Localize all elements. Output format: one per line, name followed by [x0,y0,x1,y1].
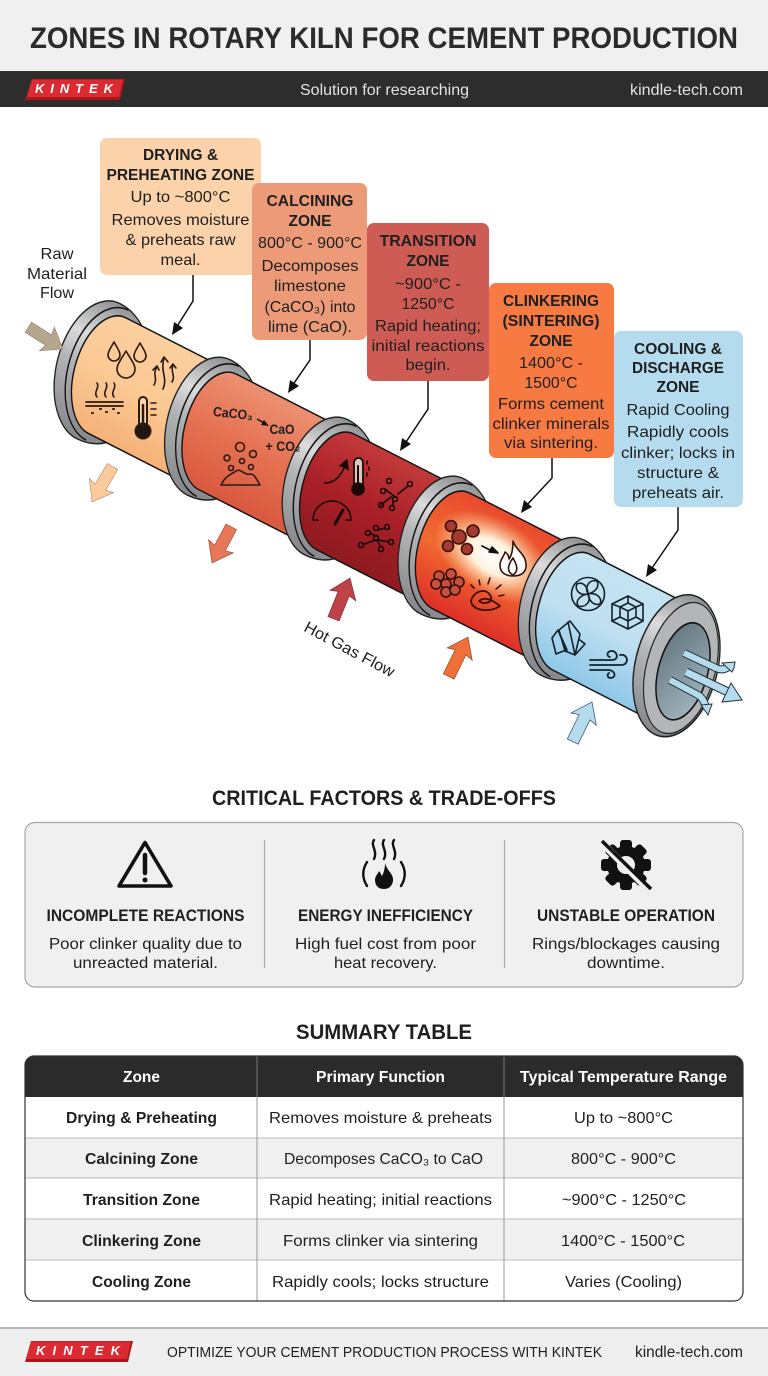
row: drying: Removes moisture & preheats [269,1110,492,1127]
table header: Primary Function [316,1069,445,1086]
segment: calcining [169,359,359,552]
formula: calcining reaction: + CO₂ [266,439,300,454]
row: drying: Drying & Preheating [66,1110,217,1127]
callout: calcining: limestone [274,278,346,295]
icons: drying zone [86,342,176,438]
label: hot gas flow: Hot Gas Flow [301,619,398,681]
callout: transition [367,223,489,381]
glow [424,491,562,622]
callout: cooling and discharge: clinker; locks in [621,445,735,462]
row: cooling [92,1274,682,1291]
leader arrow: cooling [646,507,678,577]
row: transition: Transition Zone [83,1192,200,1209]
row: transition: Rapid heating; initial reactions [269,1192,492,1209]
callout: calcining: CALCINING [266,193,354,210]
row: drying [66,1110,673,1127]
icons: transition zone [313,458,412,552]
factor: unstable operation [532,840,720,972]
arrow: hot gas orange [436,631,481,683]
callout: calcining: Decomposes [262,258,358,275]
table header [123,1069,727,1086]
callout: calcining: lime (CaO). [268,319,352,336]
segment: drying [58,302,242,492]
arrow: calcining outflow [200,520,244,570]
callout: transition: begin. [406,357,450,374]
callout: cooling and discharge: preheats air. [632,485,724,502]
callout: clinkering: ZONE [530,333,573,350]
footer [0,1328,768,1376]
kiln body [38,283,736,753]
label: raw material flow: Raw [40,246,74,263]
icons: clinkering zone [431,520,526,610]
row: transition [83,1192,686,1209]
callout: clinkering [489,283,614,458]
panel: critical factors [25,822,743,987]
callout: cooling and discharge: structure & [637,465,719,482]
callout: drying and preheating: Up to ~800°C [130,189,230,206]
footer tagline: OPTIMIZE YOUR CEMENT PRODUCTION PROCESS WITH KINTEK [167,1344,602,1361]
callout: transition: 1250°C [402,296,454,313]
callout: transition: ZONE [406,253,450,270]
callout: calcining [252,183,367,340]
heading: summary table: SUMMARY TABLE [296,1021,472,1044]
table header: Typical Temperature Range [520,1069,727,1086]
flange 5 [502,521,611,689]
factor: energy inefficiency [295,840,477,972]
factor: unstable operation: downtime. [587,955,665,972]
leader arrow: clinkering [521,458,552,513]
callout: clinkering: via sintering. [504,435,598,452]
row: transition: ~900°C - 1250°C [562,1192,686,1209]
row: cooling: Varies (Cooling) [565,1274,682,1291]
tagline: Solution for researching [300,82,469,99]
row: calcining: Decomposes CaCO₃ to CaO [284,1151,483,1168]
summary table [25,1056,743,1301]
factor: unstable operation: Rings/blockages causing [532,936,720,953]
callout: transition: TRANSITION [380,233,476,250]
row: cooling: Cooling Zone [92,1274,191,1291]
callout: drying and preheating: meal. [160,252,200,269]
callout: drying and preheating: PREHEATING ZONE [106,167,255,184]
callout: cooling and discharge: ZONE [656,379,700,396]
factor: incomplete reactions: INCOMPLETE REACTIONS [46,906,244,925]
segment: cooling [522,539,698,725]
logo: KINTEK [25,79,125,100]
logo: KINTEK: KINTEK [35,81,115,96]
formula: calcining reaction: CaO [270,422,294,437]
footer logo: KINTEK [36,1343,122,1358]
callout: clinkering: 1400°C - [519,355,583,372]
callout: drying and preheating: Removes moisture [112,212,250,229]
factor: incomplete reactions: unreacted material. [73,955,218,972]
label: raw material flow [27,246,87,302]
table header: Zone [123,1069,160,1086]
row: cooling: Rapidly cools; locks structure [272,1274,489,1291]
formula: calcining reaction: CaCO₃ [212,404,254,423]
flange 3 [266,400,375,568]
callout: clinkering: Forms cement [498,396,605,413]
callout: transition: Rapid heating; [375,318,481,335]
callout: drying and preheating [100,138,261,275]
icon: crossed gear [601,840,651,890]
callout: cooling and discharge: COOLING & [634,341,722,358]
factor: energy inefficiency: High fuel cost from poor [295,936,477,953]
footer logo [25,1341,133,1362]
callout: clinkering: 1500°C [524,375,578,392]
website: kindle-tech.com [630,82,743,99]
label: raw material flow: Material [27,266,87,283]
factor: incomplete reactions [46,842,244,972]
segment: transition [286,419,475,611]
heading: critical factors: CRITICAL FACTORS & TRADE-OFFS [212,787,556,810]
row: calcining: 800°C - 900°C [571,1151,676,1168]
callout: cooling and discharge [614,331,743,507]
callout: drying and preheating: DRYING & [143,147,218,164]
leader arrow: transition [400,381,428,451]
leader arrow: drying [172,275,193,335]
row: calcining: Calcining Zone [85,1151,198,1168]
arrow: hot gas blue [560,696,605,748]
callout: cooling and discharge: DISCHARGE [632,360,724,377]
factor: energy inefficiency: heat recovery. [334,955,437,972]
flange 4 [382,459,491,627]
row: clinkering [82,1233,685,1250]
row: drying: Up to ~800°C [574,1110,673,1127]
row: calcining [85,1151,676,1168]
footer website: kindle-tech.com [635,1344,743,1361]
callout: calcining: 800°C - 900°C [258,235,362,252]
callout: transition: ~900°C - [395,276,461,293]
factor: energy inefficiency: ENERGY INEFFICIENCY [298,906,474,925]
exit arrows [670,653,742,715]
callout: calcining: (CaCO₃) into [264,299,356,316]
icon: heat and flame [363,840,405,889]
flange 2 [148,340,257,508]
arrow: raw material in [21,315,70,361]
callout: clinkering: (SINTERING) [502,313,600,330]
end flange [617,578,736,753]
row: clinkering: Clinkering Zone [82,1233,201,1250]
row: clinkering: Forms clinker via sintering [283,1233,478,1250]
icons: calcining zone [221,442,260,485]
formula: calcining reaction [212,404,300,454]
leader arrow: calcining [288,340,310,393]
callout: cooling and discharge: Rapidly cools [627,424,729,441]
callout: calcining: ZONE [288,213,332,230]
segment: clinkering [402,478,595,673]
callout: transition: initial reactions [372,338,484,355]
arrow: hot gas red [321,573,363,624]
factor: incomplete reactions: Poor clinker quality due to [49,936,242,953]
row: clinkering: 1400°C - 1500°C [561,1233,685,1250]
arrow: drying outflow [80,459,125,509]
callout: cooling and discharge: Rapid Cooling [626,402,730,419]
factor: unstable operation: UNSTABLE OPERATION [537,906,715,925]
callout: clinkering: CLINKERING [503,293,599,310]
callout: clinkering: clinker minerals [492,416,610,433]
icons: cooling zone [552,578,643,678]
label: raw material flow: Flow [40,285,74,302]
header bar [0,71,768,107]
icon: warning triangle [119,842,171,886]
flange 1 [38,284,147,452]
header background [0,0,768,71]
callout: drying and preheating: & preheats raw [126,232,236,249]
